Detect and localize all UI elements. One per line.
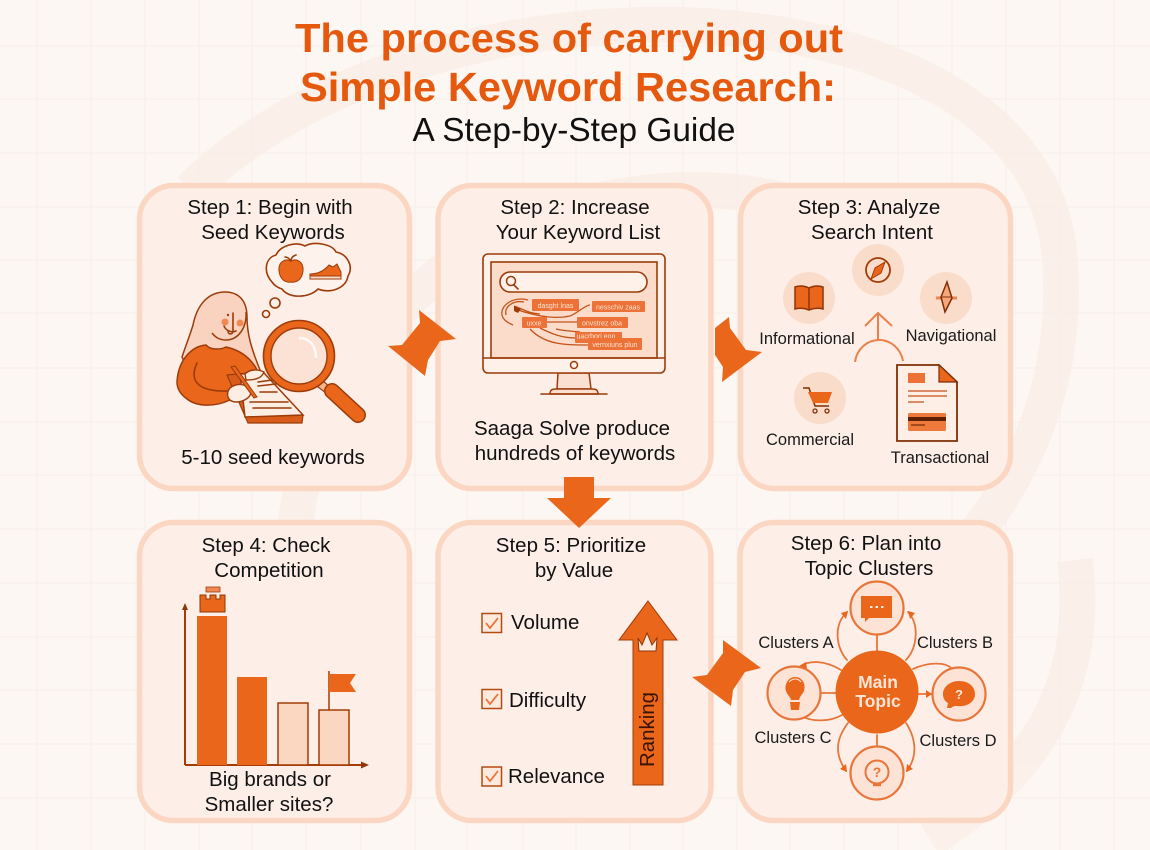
illustration: monitor: uacrbori eon <box>577 334 616 340</box>
panel: step 5 <box>438 522 711 820</box>
node: top <box>850 582 904 634</box>
heading: step 6: Step 6: Plan into <box>791 532 941 555</box>
item: relevance: Relevance <box>508 765 605 788</box>
illustration: magnifying glass <box>264 320 358 415</box>
panel: step 1: Seed Keywords <box>201 221 345 244</box>
illustration: monitor: nesschiv zaas <box>596 304 640 312</box>
caption: step 4: Smaller sites? <box>205 793 333 816</box>
bar chart: competition <box>182 587 369 768</box>
icon: cart <box>794 372 846 424</box>
caption: step 4: Big brands or <box>209 768 331 791</box>
label: clusters a: Clusters A <box>758 634 834 652</box>
heading: step 4: Step 4: Check <box>202 534 331 557</box>
caption: step 1: 5-10 seed keywords <box>181 446 365 469</box>
illustration: monitor: onvstrez oba <box>582 320 622 328</box>
arrow: intent fork <box>855 313 903 362</box>
arrow: step 2 to step 5 <box>547 477 611 528</box>
illustration: thought bubble <box>262 244 350 318</box>
icon: flag <box>329 671 356 710</box>
node: main topic <box>836 650 918 734</box>
panel: step 3 <box>740 186 1010 488</box>
heading: step 5: Step 5: Prioritize <box>496 534 646 557</box>
node: bottom: ? <box>873 764 881 780</box>
item: difficulty: Difficulty <box>509 689 587 712</box>
label: clusters d: Clusters D <box>919 732 997 750</box>
arrow: ranking: Ranking <box>637 692 659 767</box>
panel: step 6: Topic Clusters <box>805 557 933 580</box>
node: right: ? <box>955 687 963 702</box>
title: The process of carrying out <box>295 15 843 61</box>
label: informational: Informational <box>759 330 855 348</box>
panel: step 4: Competition <box>214 559 324 582</box>
arrow: ranking <box>619 601 677 785</box>
illustration: person <box>177 292 303 423</box>
panel: step 2: Your Keyword List <box>496 221 661 244</box>
caption: step 2: Saaga Solve produce <box>474 417 670 440</box>
checklist <box>482 611 605 788</box>
icon: navigation star <box>920 272 972 324</box>
title: Simple Keyword Research: <box>300 64 836 110</box>
icon: compass <box>852 244 904 296</box>
label: clusters b: Clusters B <box>917 634 993 652</box>
arrow: step 6 to step 5 <box>692 640 761 706</box>
panel: step 5: by Value <box>535 559 613 582</box>
arrow: step 2 to step 1 <box>388 310 456 376</box>
illustration: monitor: uxxe <box>527 320 541 328</box>
node: right <box>932 668 986 720</box>
label: transactional: Transactional <box>891 449 989 467</box>
heading: step 2: Step 2: Increase <box>500 196 650 219</box>
title: A Step-by-Step Guide <box>412 111 736 148</box>
panel: step 6 <box>740 522 1010 820</box>
illustration: monitor: dasght lnas <box>538 303 574 310</box>
caption: step 2 <box>474 417 675 465</box>
label: commercial: Commercial <box>766 431 854 449</box>
icon: document <box>897 365 957 441</box>
label: clusters c: Clusters C <box>754 729 832 747</box>
node: main topic: Topic <box>855 691 901 711</box>
panel: step 3: Search Intent <box>811 221 933 244</box>
heading: step 1: Step 1: Begin with <box>187 196 353 219</box>
heading: step 3: Step 3: Analyze <box>798 196 940 219</box>
arrow: step 3 to step 2 <box>715 317 762 382</box>
caption: step 4 <box>205 768 333 816</box>
item: volume: Volume <box>511 611 579 634</box>
node: bottom <box>850 746 904 800</box>
illustration: monitor: vernxiuns plun <box>592 342 638 349</box>
caption: step 2: hundreds of keywords <box>475 442 675 465</box>
panel: step 1 <box>140 186 410 488</box>
icon: castle <box>200 587 225 612</box>
node: left <box>768 666 820 720</box>
illustration: monitor <box>483 254 665 394</box>
label: navigational: Navigational <box>906 327 996 345</box>
node: main topic: Main <box>858 672 898 692</box>
icon: book <box>783 272 835 324</box>
title <box>295 15 843 148</box>
diagram: topic clusters <box>754 582 997 800</box>
panel: step 4 <box>140 522 410 820</box>
panel: step 2 <box>438 186 711 488</box>
